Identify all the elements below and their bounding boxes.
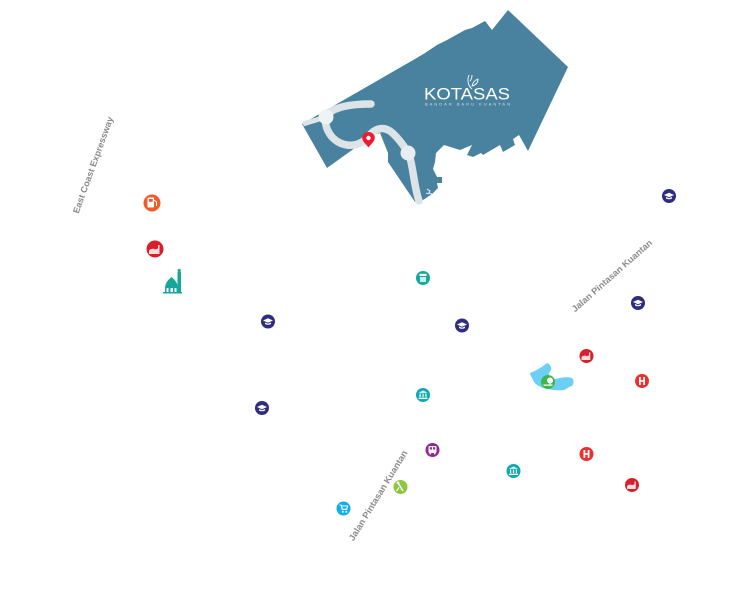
icon: school 2 bbox=[631, 296, 645, 310]
icon: hospital 1 bbox=[635, 374, 649, 388]
road network bbox=[303, 104, 419, 201]
logo tagline: BANDAR BARU KUANTAN bbox=[425, 102, 510, 106]
icon: school 3 bbox=[261, 314, 275, 328]
small logo mark bbox=[426, 189, 432, 194]
lake bbox=[530, 363, 574, 390]
logo: Kotasas bbox=[424, 75, 510, 106]
icon: bank 1 bbox=[416, 388, 430, 402]
road junction west bbox=[318, 110, 334, 124]
road label: Jalan Pintasan Kuantan south: Jalan Pintasan Kuantan bbox=[347, 449, 410, 543]
road label: East Coast Expressway: East Coast Expressway bbox=[71, 115, 115, 215]
icon: library building bbox=[416, 271, 430, 285]
icon: mosque bbox=[163, 269, 182, 294]
icon: factory bbox=[146, 240, 164, 258]
icon: school 5 bbox=[255, 401, 269, 415]
icon: bank 2 bbox=[506, 464, 520, 478]
icon: park bbox=[541, 375, 555, 389]
icon: school 1 bbox=[662, 189, 676, 203]
road junction south bbox=[400, 146, 416, 160]
icon: golf bbox=[394, 480, 408, 494]
icon: factory east 2 bbox=[625, 478, 639, 492]
icon: factory east 1 bbox=[580, 349, 594, 363]
logo leaf mark bbox=[468, 75, 478, 89]
icon: shopping cart bbox=[336, 502, 350, 516]
icon: hospital 2 bbox=[580, 447, 594, 461]
icon: bus bbox=[426, 443, 440, 457]
land parcel bbox=[302, 10, 568, 202]
icon: petrol station bbox=[144, 194, 160, 212]
panel: Kotasas land parcel map bbox=[302, 10, 568, 202]
road label: Jalan Pintasan Kuantan north: Jalan Pintasan Kuantan bbox=[570, 238, 654, 314]
icon: location pin bbox=[362, 132, 375, 148]
icon: school 4 bbox=[455, 318, 469, 332]
logo wordmark: KOTASAS bbox=[424, 85, 510, 103]
